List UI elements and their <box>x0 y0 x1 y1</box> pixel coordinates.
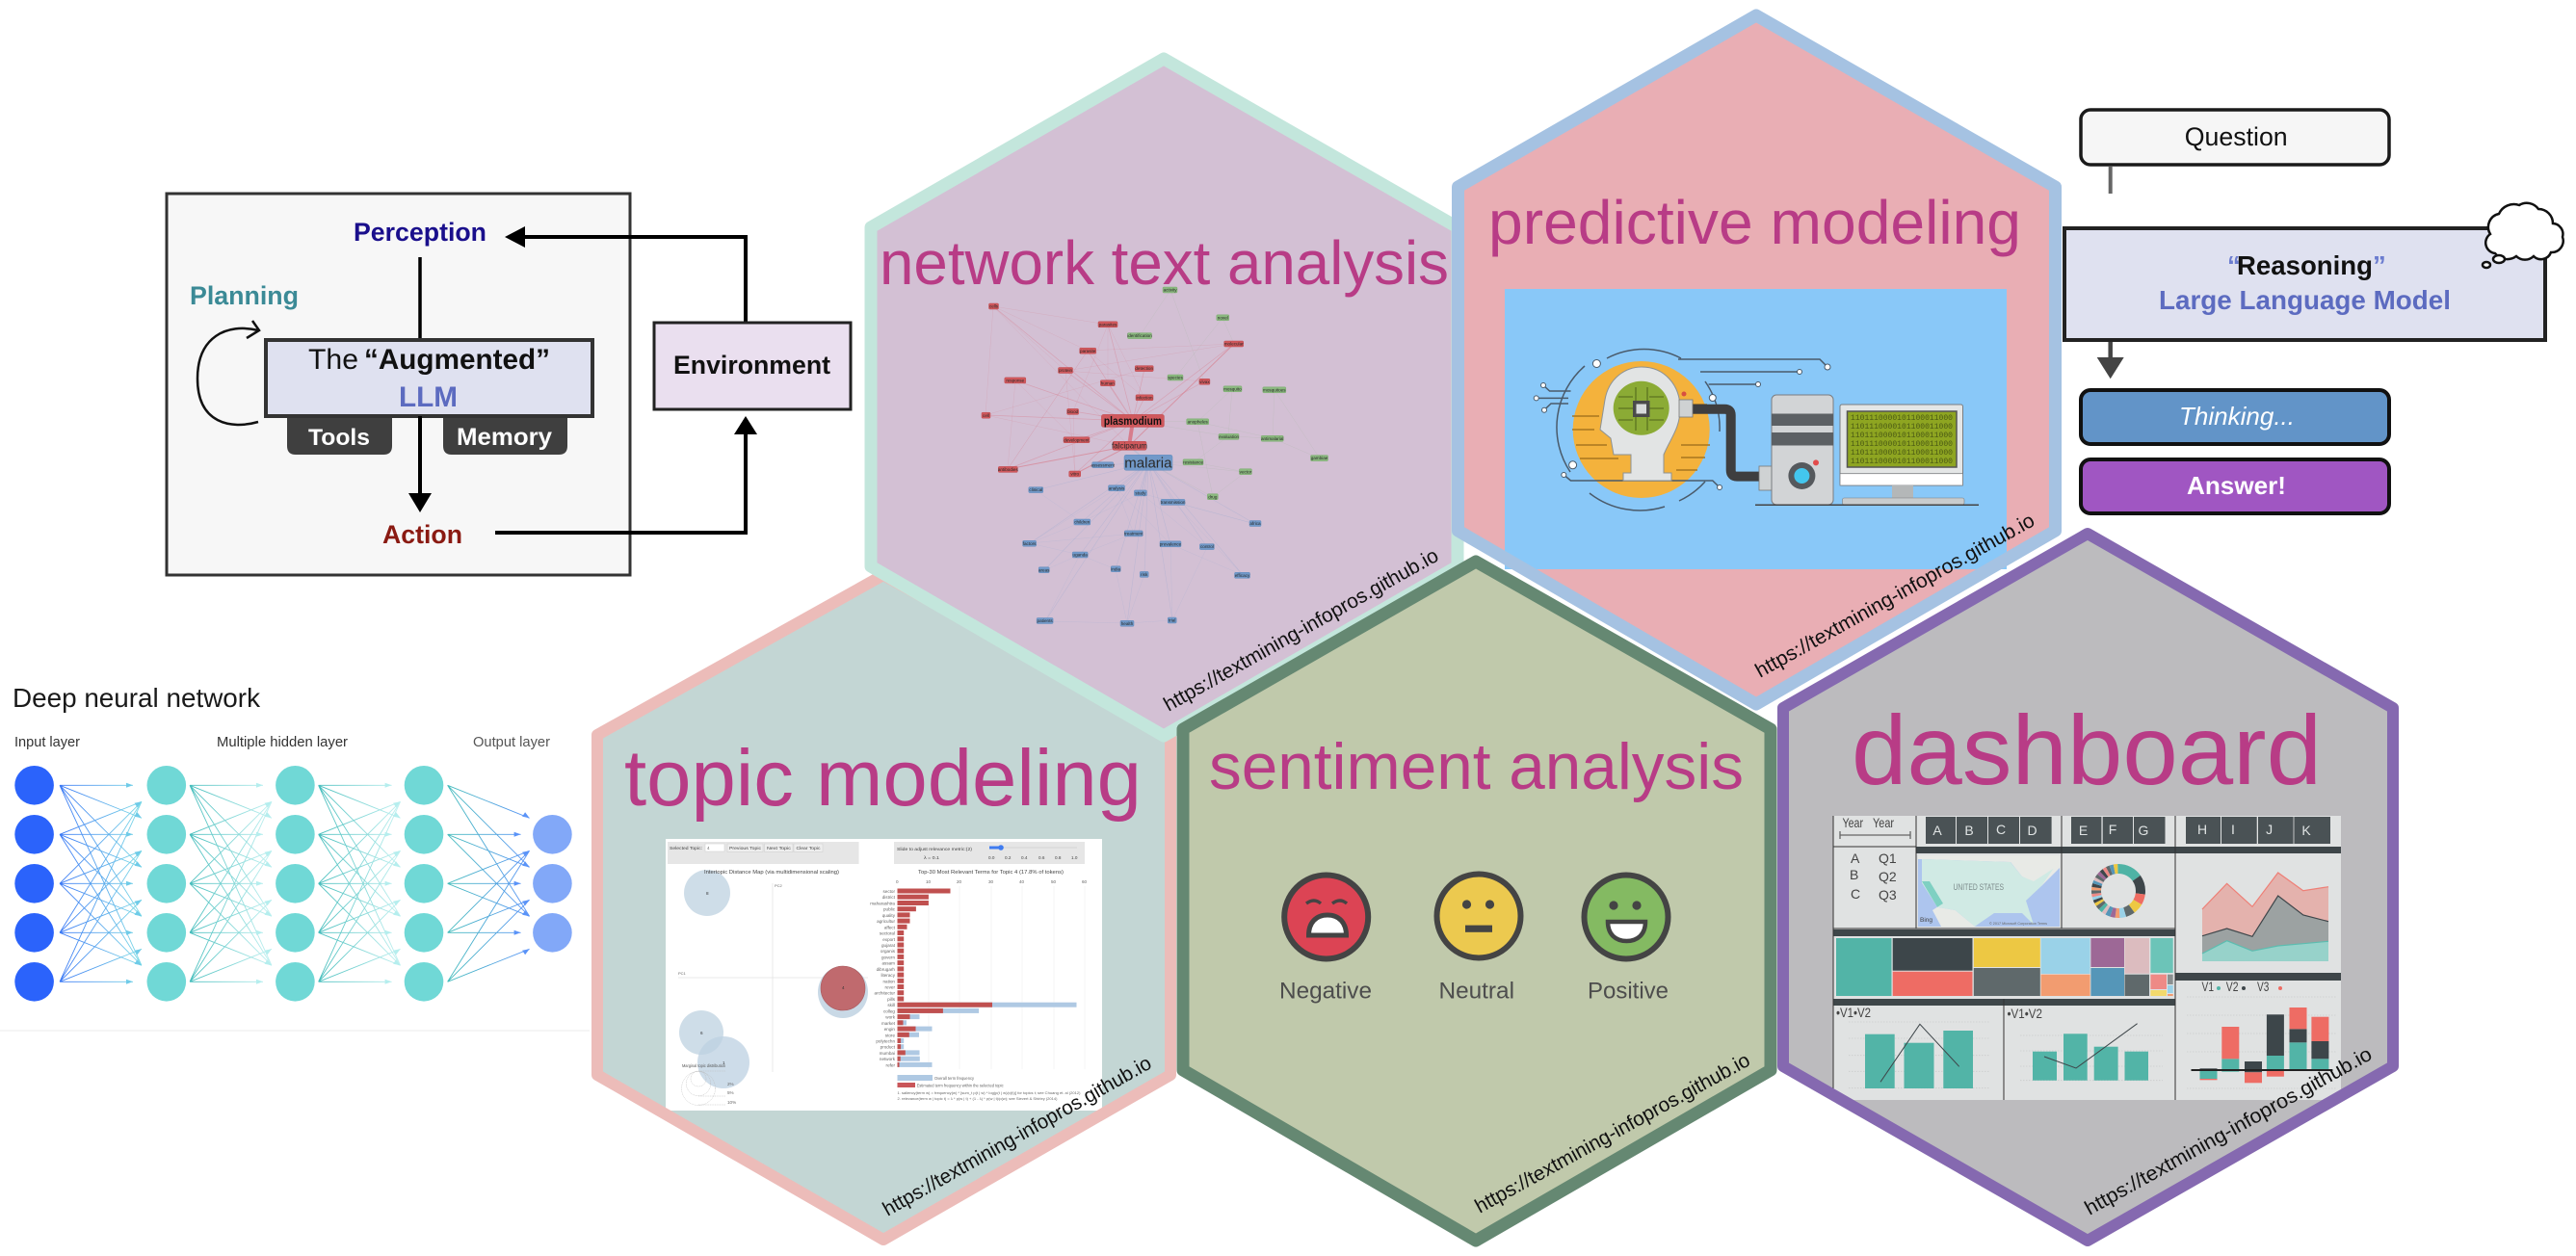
tab: Tools: Tools <box>308 425 370 451</box>
slicer: year and categories: Year <box>1873 815 1894 830</box>
panel: sentiment analysis hexagon <box>1183 562 1771 1241</box>
chart: LDAvis topic model screenshot: 10% <box>727 1100 736 1105</box>
chart: word co-occurrence network: cells <box>989 304 999 309</box>
chart: bars and line middle: •V1•V2 <box>2008 1006 2042 1021</box>
chart: word co-occurrence network: malaria <box>1124 455 1172 472</box>
chart: word co-occurrence network: resistance <box>1183 459 1204 464</box>
panel: network text analysis hexagon <box>871 59 1458 736</box>
chart: bars and line middle <box>2008 1006 2163 1081</box>
icon: positive face <box>1584 875 1669 959</box>
buttons: lettered filters: E <box>2079 823 2088 838</box>
chart: LDAvis topic model screenshot: market <box>881 1021 896 1026</box>
chart: LDAvis topic model screenshot: 8 <box>706 891 709 896</box>
illustration: AI head connected to computer: 1101110000101100011000 <box>1851 458 1953 466</box>
chart: bars and line left <box>1836 1005 1990 1088</box>
chart: word co-occurrence network: parasite <box>1080 349 1096 353</box>
connections: hidden to hidden 1 <box>190 783 272 984</box>
chart: word co-occurrence network: parasites <box>1099 322 1117 327</box>
label: Action: Action <box>382 520 462 549</box>
url: dashboard: https://textmining-infopros.github.io <box>2081 1043 2376 1219</box>
map: United States: Bing <box>1920 917 1932 924</box>
slicer: year and categories: Q2 <box>1879 869 1897 884</box>
chart: LDAvis topic model screenshot: architectur <box>875 991 895 996</box>
chart: LDAvis topic model screenshot: network <box>880 1057 896 1061</box>
panel: augmented LLM agent diagram <box>167 194 851 575</box>
chart: word co-occurrence network: drug <box>1208 494 1218 499</box>
box: Environment <box>654 323 851 409</box>
illustration: AI head connected to computer: 1101110000101100011000 <box>1851 414 1953 423</box>
chart: LDAvis topic model screenshot: PC1 <box>678 971 687 976</box>
chart: LDAvis topic model screenshot: govern <box>881 955 895 959</box>
chart: word co-occurrence network: human <box>1101 380 1115 385</box>
chart: word co-occurrence network: study <box>1135 491 1146 495</box>
chart: LDAvis topic model screenshot: literacy <box>881 973 896 978</box>
illustration: AI head connected to computer: 1101110000101100011000 <box>1851 449 1953 458</box>
chart: LDAvis topic model screenshot <box>666 839 1102 1111</box>
chart: LDAvis topic model screenshot: export <box>882 937 896 942</box>
chart: LDAvis topic model screenshot: rever <box>885 984 895 990</box>
box: augmented LLM: The <box>308 344 358 376</box>
chart: word co-occurrence network: species <box>1168 376 1183 380</box>
connector: perception to LLM <box>418 257 422 339</box>
icon: negative face <box>1284 875 1368 959</box>
chart: LDAvis topic model screenshot: engin <box>884 1027 895 1032</box>
chart: LDAvis topic model screenshot: 2% <box>727 1082 734 1086</box>
buttons: lettered filters: A <box>1932 823 1942 838</box>
map: United States <box>1918 855 2060 927</box>
url: sentiment analysis: https://textmining-infopros.github.io <box>1471 1049 1754 1217</box>
chart: LDAvis topic model screenshot: Previous Topic <box>729 846 762 850</box>
chart: word co-occurrence network: novel <box>1218 315 1228 320</box>
chart: LDAvis topic model screenshot: 50 <box>1051 879 1057 884</box>
chart: word co-occurrence network: patients <box>1038 618 1053 623</box>
chart: LDAvis topic model screenshot: affect <box>884 925 896 929</box>
heading: predictive modeling: predictive modeling <box>1488 188 2021 257</box>
chart: LDAvis topic model screenshot: polytechn <box>876 1038 895 1044</box>
chart: LDAvis topic model screenshot: Overall term frequency <box>934 1076 975 1081</box>
chart: word co-occurrence network: infection <box>1136 395 1153 400</box>
chart: word co-occurrence network: clinical <box>1029 487 1042 492</box>
connections: hidden to output <box>448 785 530 981</box>
box: Question <box>2081 110 2389 165</box>
chart: word co-occurrence network: trial <box>1169 618 1175 623</box>
panel: reasoning LLM diagram <box>2064 110 2563 513</box>
chart: LDAvis topic model screenshot: district <box>882 895 896 900</box>
chart: word co-occurrence network: gambiae <box>1311 456 1328 460</box>
chart: word co-occurrence network: control <box>1200 544 1214 549</box>
slicer: year and categories: Q3 <box>1879 887 1897 903</box>
nodes: hidden layers <box>146 766 443 1002</box>
chart: word co-occurrence network: treatment <box>1124 532 1143 536</box>
chart: LDAvis topic model screenshot: Clear Topic <box>796 846 821 850</box>
illustration: AI head connected to computer: 1101110000101100011000 <box>1851 432 1953 440</box>
label: Planning: Planning <box>190 281 299 310</box>
hexagon fill: topic modeling <box>597 575 1170 1240</box>
heading: network text analysis: network text analysis <box>880 228 1449 298</box>
layer label: hidden: Multiple hidden layer <box>217 734 348 750</box>
chart: treemap <box>1836 938 2173 996</box>
chart: word co-occurrence network: detection <box>1135 366 1153 371</box>
chart: LDAvis topic model screenshot: refer <box>886 1062 895 1067</box>
arrow: planning loop <box>197 321 259 425</box>
chart: LDAvis topic model screenshot: 20 <box>957 879 962 884</box>
chart: LDAvis topic model screenshot: mumbai <box>880 1051 895 1056</box>
panel: topic modeling hexagon <box>597 575 1170 1240</box>
box: Thinking: Thinking... <box>2179 402 2295 431</box>
layer label: output: Output layer <box>473 734 550 750</box>
illustration: AI head connected to computer: 1101110000101100011000 <box>1851 423 1953 432</box>
chart: LDAvis topic model screenshot: Marginal topic distribution <box>682 1063 725 1068</box>
buttons: lettered filters: H <box>2197 822 2207 837</box>
chart: LDAvis topic model screenshot: Intertopic Distance Map (via multidimensional scaling) <box>704 870 839 876</box>
chart: word co-occurrence network: vitro <box>1070 472 1079 477</box>
heading: Deep neural network: Deep neural network <box>13 683 261 713</box>
buttons: lettered filters: G <box>2139 823 2148 838</box>
slicer: year and categories <box>1840 815 1910 903</box>
hexagon fill: predictive modeling <box>1459 15 2056 704</box>
chart: donut <box>2096 869 2141 913</box>
chart: word co-occurrence network: evaluation <box>1219 434 1240 439</box>
hexagon: network text analysis <box>871 59 1458 736</box>
chart: word co-occurrence network: development <box>1064 437 1090 442</box>
connections: input to hidden <box>60 783 142 984</box>
chart: LDAvis topic model screenshot: 40 <box>1019 879 1025 884</box>
chart: word co-occurrence network: areas <box>1038 567 1050 572</box>
chart: word co-occurrence network: protein <box>1059 368 1072 373</box>
arrow: LLM to action <box>408 416 432 512</box>
chart: word co-occurrence network: africa <box>1249 521 1261 526</box>
box: reasoning large language model <box>2064 228 2545 340</box>
chart: LDAvis topic model screenshot: 0 <box>896 879 899 884</box>
illustration: AI head connected to computer <box>1505 289 2007 569</box>
chart: LDAvis topic model screenshot: 10 <box>926 879 932 884</box>
buttons: lettered filters: B <box>1964 823 1974 838</box>
chart: LDAvis topic model screenshot: 2. relevance(term w | topic t) = λ * p(w | t) + (1 - λ) * p(w | t)/p(w); see Sievert & Shirley (2014) <box>898 1096 1058 1101</box>
chart: LDAvis topic model screenshot: λ = 0.1 <box>924 855 940 860</box>
chart: bars and line left: •V1•V2 <box>1836 1005 1871 1020</box>
chart: stacked bars right <box>2187 979 2337 1088</box>
chart: LDAvis topic model screenshot: pills <box>887 997 896 1002</box>
icon: thought cloud <box>2483 203 2563 268</box>
arrow: LLM to thinking <box>2097 342 2124 379</box>
chart: word co-occurrence network: activity <box>1164 288 1177 293</box>
chart: dashboard mock-up <box>1833 815 2341 1100</box>
chart: LDAvis topic model screenshot: 30 <box>988 879 994 884</box>
chart: LDAvis topic model screenshot: 6 <box>700 1031 703 1035</box>
chart: word co-occurrence network <box>982 287 1328 626</box>
chart: LDAvis topic model screenshot: PC2 <box>775 883 783 888</box>
chart: word co-occurrence network: antibodies <box>998 467 1018 472</box>
buttons: lettered filters: I <box>2231 822 2235 837</box>
connector: question to LLM <box>2109 167 2113 194</box>
box: augmented LLM: LLM <box>399 381 458 413</box>
chart: word co-occurrence network: blood <box>1067 409 1079 414</box>
chart: LDAvis topic model screenshot: dibrugarh <box>877 967 895 972</box>
box: reasoning large language model: Large Language Model <box>2159 285 2451 315</box>
hexagon border: topic modeling <box>597 575 1170 1240</box>
chart: word co-occurrence network: response <box>1006 378 1025 383</box>
chart: word co-occurrence network: vivax <box>1199 379 1210 384</box>
chart: LDAvis topic model screenshot: 0.0 <box>988 855 995 860</box>
box: Thinking <box>2081 390 2389 444</box>
chart: LDAvis topic model screenshot: 4 <box>842 985 845 990</box>
buttons: lettered filters <box>1926 817 2330 844</box>
slicer: year and categories: Year <box>1842 815 1863 830</box>
chart: LDAvis topic model screenshot: 5% <box>727 1090 734 1095</box>
heading: sentiment analysis: sentiment analysis <box>1209 731 1744 803</box>
tab: Memory: Memory <box>457 424 552 451</box>
buttons: lettered filters: K <box>2301 823 2311 838</box>
chart: LDAvis topic model screenshot: assam <box>881 961 895 966</box>
chart: word co-occurrence network: cell <box>983 413 989 418</box>
box: Environment: Environment <box>673 351 830 379</box>
chart: word co-occurrence network: mosquitoes <box>1263 387 1286 392</box>
chart: LDAvis topic model screenshot: 4 <box>707 846 710 850</box>
panel: deep neural network diagram <box>13 683 572 1002</box>
buttons: lettered filters: D <box>2028 823 2037 838</box>
hexagon border: predictive modeling <box>1459 15 2056 704</box>
panel: dashboard hexagon <box>1783 534 2393 1241</box>
chart: LDAvis topic model screenshot: gujarat <box>881 943 896 948</box>
chart: word co-occurrence network: antimalarial <box>1261 436 1283 441</box>
chart: word co-occurrence network: analysis <box>1109 485 1125 490</box>
tab: Memory <box>443 418 567 455</box>
chart: LDAvis topic model screenshot: Slide to adjust relevance metric:(2) <box>897 847 973 851</box>
chart: LDAvis topic model screenshot: agricultur <box>877 919 895 924</box>
icon: neutral face <box>1437 875 1520 957</box>
chart: LDAvis topic model screenshot: Estimated term frequency within the selected topic <box>917 1083 1004 1088</box>
chart: LDAvis topic model screenshot: colleg <box>883 1008 895 1013</box>
chart: LDAvis topic model screenshot: Top-30 Most Relevant Terms for Topic 4 (17.8% of tokens) <box>918 870 1064 876</box>
buttons: lettered filters: F <box>2109 822 2116 837</box>
chart: LDAvis topic model screenshot: sector <box>882 889 895 894</box>
label: Perception: Perception <box>354 218 486 247</box>
chart: word co-occurrence network: molecular <box>1224 342 1244 347</box>
heading: topic modeling: topic modeling <box>624 733 1142 823</box>
chart: word co-occurrence network: transmission <box>1161 500 1186 505</box>
chart: LDAvis topic model screenshot: product <box>881 1045 896 1050</box>
label: Negative: Negative <box>1279 979 1372 1005</box>
label: Neutral: Neutral <box>1439 979 1514 1005</box>
chart: word co-occurrence network: identification <box>1127 333 1152 338</box>
chart: word co-occurrence network: anopheles <box>1188 419 1209 424</box>
slicer: year and categories: A <box>1851 850 1860 866</box>
buttons: lettered filters: C <box>1996 822 2006 837</box>
arrow: action to environment <box>495 416 757 533</box>
chart: word co-occurrence network: falciparum <box>1112 442 1147 451</box>
chart: LDAvis topic model screenshot: sectoral <box>880 930 895 936</box>
chart: LDAvis topic model screenshot: public <box>883 907 896 912</box>
chart: area chart <box>2202 873 2328 961</box>
chart: LDAvis topic model screenshot: 0.2 <box>1005 855 1012 860</box>
chart: word co-occurrence network: uganda <box>1073 553 1088 558</box>
chart: LDAvis topic model screenshot: maharashtra <box>870 902 895 905</box>
map: United States: © 2017 Microsoft Corporation Terms <box>1989 921 2047 926</box>
chart: word co-occurrence network: plasmodium <box>1104 416 1162 428</box>
chart: word co-occurrence network: assessment <box>1091 462 1116 467</box>
chart: word co-occurrence network: health <box>1121 621 1134 626</box>
chart: word co-occurrence network: efficacy <box>1235 573 1250 578</box>
hexagon fill: dashboard <box>1783 534 2393 1241</box>
chart: LDAvis topic model screenshot: 1.0 <box>1071 855 1078 860</box>
box: Question: Question <box>2185 122 2288 151</box>
chart: LDAvis topic model screenshot: 1. saliency(term w) = frequency(w) * [sum_t p(t | w) * log(p(t | w)/p(t))] for topics t; see Chuang et. al (2012) <box>898 1090 1081 1095</box>
chart: stacked bars right: V3 <box>2257 979 2269 994</box>
chart: LDAvis topic model screenshot: 1 <box>723 1060 725 1065</box>
chart: LDAvis topic model screenshot: 0.4 <box>1021 855 1028 860</box>
chart: LDAvis topic model screenshot: 0.8 <box>1055 855 1062 860</box>
slicer: year and categories: Q1 <box>1879 850 1897 866</box>
panel: predictive modeling hexagon <box>1459 15 2056 704</box>
chart: word co-occurrence network: prevalence <box>1160 541 1182 546</box>
url: predictive modeling: https://textmining-infopros.github.io <box>1751 510 2038 682</box>
chart: LDAvis topic model screenshot: store <box>885 1033 895 1037</box>
url: network text analysis: https://textmining-infopros.github.io <box>1160 544 1442 716</box>
box: reasoning large language model: “ <box>2227 250 2241 280</box>
box: reasoning large language model: ” <box>2373 250 2386 280</box>
chart: word co-occurrence network: risk <box>1141 572 1148 577</box>
hexagon border: dashboard <box>1783 534 2393 1241</box>
chart: LDAvis topic model screenshot: Next Topic <box>767 846 792 850</box>
box: Answer <box>2081 459 2389 513</box>
nodes: input layer <box>14 766 54 1002</box>
box: Answer: Answer! <box>2187 471 2286 500</box>
chart: LDAvis topic model screenshot: 0.6 <box>1038 855 1045 860</box>
chart: word co-occurrence network: india <box>1111 566 1120 571</box>
chart: stacked bars right: V2 <box>2226 979 2239 994</box>
layer label: input: Input layer <box>14 734 80 750</box>
url: topic modeling: https://textmining-infopros.github.io <box>880 1052 1155 1220</box>
chart: word co-occurrence network: factors <box>1023 541 1037 546</box>
heading: dashboard: dashboard <box>1852 695 2322 805</box>
chart: stacked bars right: V1 <box>2202 979 2214 994</box>
box: reasoning large language model: Reasoning <box>2237 250 2373 280</box>
slicer: year and categories: C <box>1851 886 1860 902</box>
agent box <box>167 194 630 575</box>
chart: LDAvis topic model screenshot: quality <box>882 913 896 918</box>
connections: hidden to hidden 2 <box>319 783 401 984</box>
illustration: AI head connected to computer: 1101110000101100011000 <box>1851 440 1953 449</box>
map: United States: UNITED STATES <box>1954 882 2004 892</box>
chart: LDAvis topic model screenshot: Selected Topic: <box>670 846 702 850</box>
arrow: environment to perception <box>505 226 746 323</box>
buttons: lettered filters: J <box>2266 822 2273 837</box>
nodes: output layer <box>533 815 572 953</box>
chart: LDAvis topic model screenshot: organis <box>881 949 896 954</box>
box: augmented LLM <box>266 340 592 416</box>
chart: LDAvis topic model screenshot: nation <box>882 979 895 983</box>
hexagon: sentiment analysis <box>1183 562 1771 1241</box>
chart: LDAvis topic model screenshot: skill <box>887 1003 895 1007</box>
slicer: year and categories: B <box>1850 867 1858 882</box>
chart: word co-occurrence network: mosquito <box>1223 386 1242 391</box>
chart: word co-occurrence network: children <box>1074 520 1091 525</box>
box: augmented LLM: “Augmented” <box>364 344 550 376</box>
label: Positive: Positive <box>1588 979 1669 1005</box>
tab: Tools <box>287 418 392 455</box>
chart: word co-occurrence network: vector <box>1240 469 1252 474</box>
chart: LDAvis topic model screenshot: 60 <box>1082 879 1088 884</box>
chart: LDAvis topic model screenshot: work <box>885 1015 896 1020</box>
